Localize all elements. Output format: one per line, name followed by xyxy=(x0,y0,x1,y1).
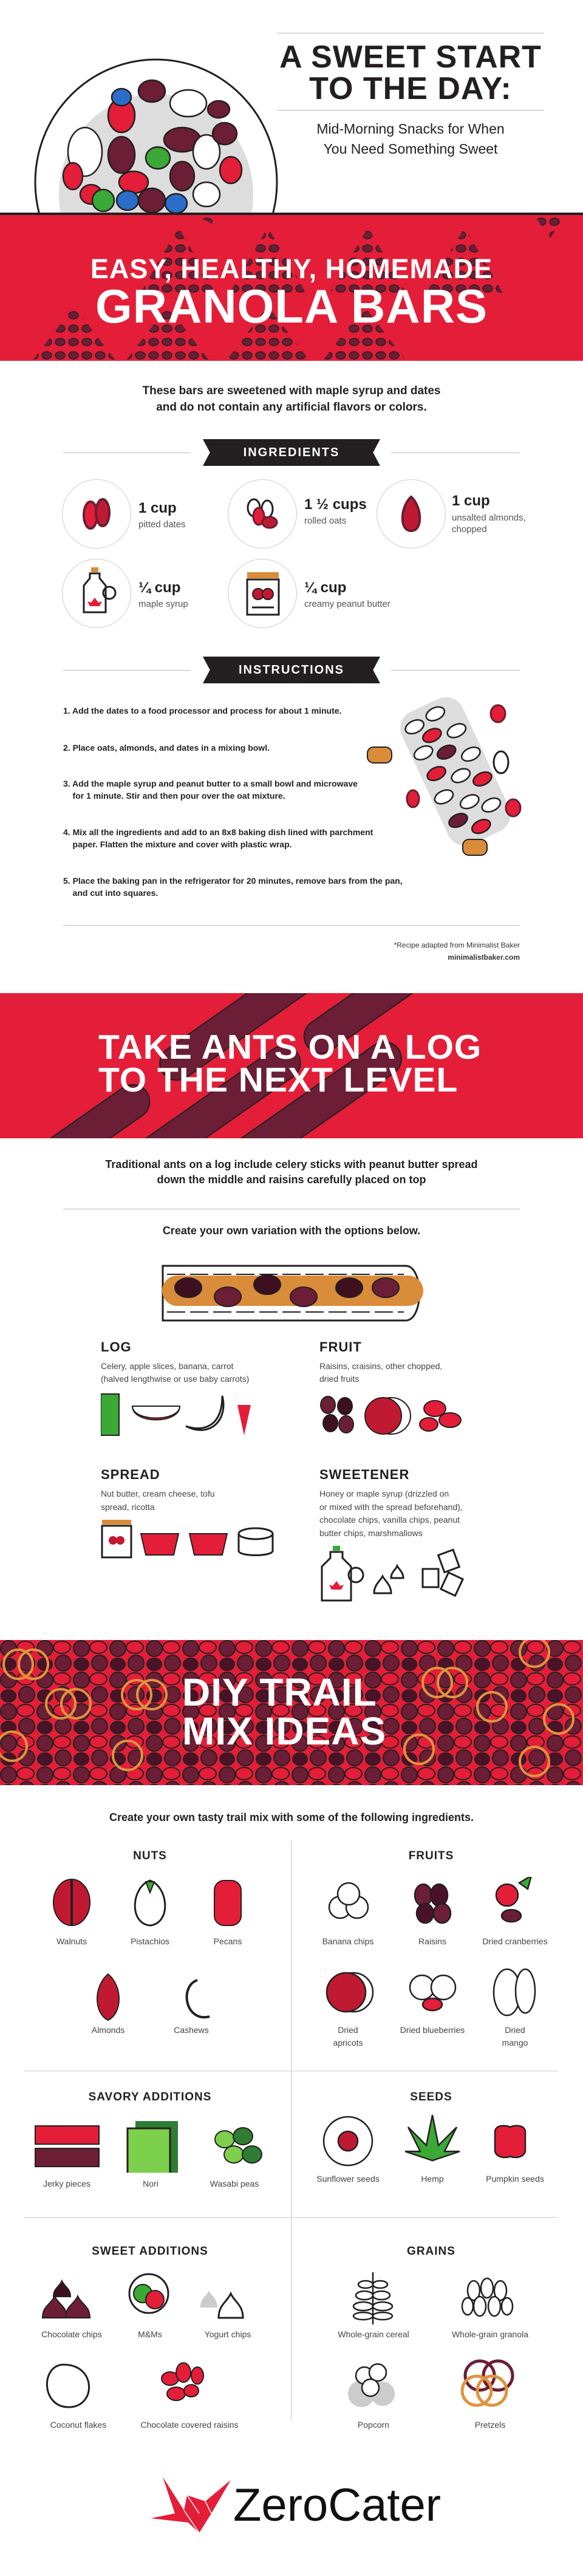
intro text granola: and do not contain any artificial flavors or colors. xyxy=(156,401,427,414)
text: 5. Place the baking pan in the refrigerator for 20 minutes, remove bars from the pan, xyxy=(63,876,403,886)
text: 2. Place oats, almonds, and dates in a mixing bowl. xyxy=(63,743,270,753)
option: log: (halved lengthwise or use baby carrots) xyxy=(101,1374,249,1384)
heading: ingredients: INGREDIENTS xyxy=(244,446,339,459)
panel: nuts: Cashews xyxy=(174,2025,209,2035)
recipe credit xyxy=(394,941,520,962)
panel: fruits: Dried xyxy=(505,2025,525,2035)
panel: sweet additions xyxy=(41,2245,251,2430)
ingredient: dates xyxy=(62,479,186,548)
option: log: LOG xyxy=(101,1339,132,1355)
panel: fruits: FRUITS xyxy=(409,1850,454,1862)
ingredient: dates: pitted dates xyxy=(138,519,186,530)
ingredient: peanut butter: ¼ cup xyxy=(304,579,346,596)
banner: granola bars: GRANOLA BARS xyxy=(95,279,488,333)
panel: fruits: Dried blueberries xyxy=(400,2025,465,2035)
option: log: Celery, apple slices, banana, carrot xyxy=(101,1361,233,1371)
recipe credit: *Recipe adapted from Minimalist Baker xyxy=(394,941,520,949)
instruction steps xyxy=(63,706,403,898)
panel: nuts: Pistachios xyxy=(131,1936,169,1946)
subtitle: You Need Something Sweet xyxy=(324,141,497,157)
option: sweetener xyxy=(319,1467,464,1601)
intro text ants xyxy=(105,1158,478,1186)
ingredient: almonds: unsalted almonds, xyxy=(452,513,526,523)
panel: nuts: NUTS xyxy=(133,1850,167,1862)
panel: seeds: Sunflower seeds xyxy=(316,2174,380,2184)
panel: sweet additions: Chocolate covered raisins xyxy=(140,2420,239,2430)
panel: savory additions: Nori xyxy=(143,2179,159,2188)
panel: grains: Whole-grain cereal xyxy=(338,2329,409,2339)
panel: sweet additions: Coconut flakes xyxy=(50,2420,106,2430)
panel: savory additions: SAVORY ADDITIONS xyxy=(89,2091,211,2103)
ingredient: maple syrup xyxy=(62,559,188,628)
banner title xyxy=(98,1028,482,1099)
panel: savory additions: Wasabi peas xyxy=(210,2179,259,2188)
panel: grains: Pretzels xyxy=(475,2420,505,2430)
panel: grains xyxy=(338,2245,528,2430)
grid dividers xyxy=(291,1840,292,2421)
banner title: EASY, HEALTHY, HOMEMADE xyxy=(90,253,493,284)
banner title: DIY TRAIL xyxy=(182,1670,377,1714)
ingredient: dates: 1 cup xyxy=(138,500,177,516)
panel: sweet additions: Yogurt chips xyxy=(205,2329,251,2339)
intro text trail mix: Create your own tasty trail mix with some of the following ingredients. xyxy=(109,1811,474,1823)
panel: fruits: Banana chips xyxy=(322,1936,373,1946)
ingredient: oats: 1 ½ cups xyxy=(304,496,367,513)
text: and cut into squares. xyxy=(73,888,158,898)
panel: sweet additions: SWEET ADDITIONS xyxy=(92,2245,208,2258)
subtitle: Mid-Morning Snacks for When xyxy=(316,121,505,137)
intro text granola xyxy=(142,384,441,414)
logo: ZeroCater xyxy=(151,2477,441,2533)
panel: grains: Whole-grain granola xyxy=(452,2329,528,2339)
banner title xyxy=(182,1670,386,1753)
banner title: MIX IDEAS xyxy=(182,1709,386,1753)
option: sweetener: Honey or maple syrup (drizzled on xyxy=(319,1489,449,1498)
intro text ants: down the middle and raisins carefully placed on top xyxy=(157,1174,426,1186)
option: sweetener: butter chips, marshmallows xyxy=(319,1528,423,1538)
panel: sweet additions: M&Ms xyxy=(138,2329,162,2339)
panel: nuts: Almonds xyxy=(92,2025,124,2035)
intro text granola: These bars are sweetened with maple syrup and dates xyxy=(142,384,441,397)
ingredient: oats xyxy=(228,479,367,548)
option: fruit: Raisins, craisins, other chopped, xyxy=(319,1361,442,1371)
banner: DIY trail mix xyxy=(0,1640,583,1785)
illustration: granola bar xyxy=(367,697,521,856)
panel: savory additions xyxy=(35,2091,262,2188)
panel: nuts: Pecans xyxy=(214,1936,242,1946)
logo: ZeroCater: ZeroCater xyxy=(233,2479,441,2531)
panel: seeds: SEEDS xyxy=(410,2091,452,2103)
panel: fruits: Dried cranberries xyxy=(482,1936,548,1946)
text: 3. Add the maple syrup and peanut butter to a small bowl and microwave xyxy=(63,779,358,788)
option: sweetener: SWEETENER xyxy=(319,1467,409,1482)
option: spread xyxy=(101,1467,273,1559)
text: 4. Mix all the ingredients and add to an 8x8 baking dish lined with parchment xyxy=(63,827,373,837)
banner title: TAKE ANTS ON A LOG xyxy=(98,1028,482,1067)
subtitle xyxy=(316,121,505,157)
option: sweetener: chocolate chips, vanilla chips, peanut xyxy=(319,1515,460,1525)
option: fruit xyxy=(319,1339,462,1435)
banner title: TO THE NEXT LEVEL xyxy=(98,1061,458,1099)
header: bowl illustration xyxy=(34,58,278,213)
banner: ants on a log xyxy=(0,993,583,1138)
option: spread: Nut butter, cream cheese, tofu xyxy=(101,1489,215,1498)
panel: nuts: Walnuts xyxy=(56,1936,87,1946)
ingredient: almonds: chopped xyxy=(452,524,487,535)
option: spread: SPREAD xyxy=(101,1467,160,1482)
ingredient: peanut butter xyxy=(228,559,390,628)
text: 1. Add the dates to a food processor and process for about 1 minute. xyxy=(63,706,341,716)
heading: instructions: INSTRUCTIONS xyxy=(239,663,344,677)
ingredient: almonds: 1 cup xyxy=(452,493,490,509)
option: fruit: dried fruits xyxy=(319,1374,359,1384)
panel: fruits: Dried xyxy=(338,2025,358,2035)
ingredient: oats: rolled oats xyxy=(304,516,346,526)
title: A sweet start to the day: TO THE DAY: xyxy=(309,71,512,106)
option: spread: spread, ricotta xyxy=(101,1502,155,1512)
panel: grains: GRAINS xyxy=(407,2245,455,2258)
panel: sweet additions: Chocolate chips xyxy=(41,2329,102,2339)
panel: fruits xyxy=(322,1850,548,2048)
ingredient: almonds xyxy=(377,479,526,548)
option: sweetener: or mixed with the spread beforehand), xyxy=(319,1502,463,1511)
panel: fruits: apricots xyxy=(333,2038,363,2048)
title: A sweet start to the day: A SWEET START xyxy=(279,39,542,75)
intro text ants: Traditional ants on a log include celery sticks with peanut butter spread xyxy=(105,1158,478,1170)
panel: nuts xyxy=(53,1850,242,2035)
text: for 1 minute. Stir and then pour over the oat mixture. xyxy=(73,791,285,801)
ingredient: maple syrup: ¼ cup xyxy=(138,579,180,596)
banner: granola bars xyxy=(0,213,583,361)
option: log xyxy=(101,1339,251,1436)
prompt text: Create your own variation with the options below. xyxy=(163,1225,420,1237)
panel: fruits: Raisins xyxy=(418,1936,446,1946)
ingredient: peanut butter: creamy peanut butter xyxy=(304,599,390,609)
title: A sweet start to the day xyxy=(279,39,542,106)
panel: seeds: Hemp xyxy=(421,2174,444,2184)
panel: fruits: mango xyxy=(502,2038,528,2048)
panel: seeds: Pumpkin seeds xyxy=(486,2174,544,2184)
panel: seeds xyxy=(316,2091,544,2184)
panel: grains: Popcorn xyxy=(358,2420,389,2430)
ingredient: maple syrup: maple syrup xyxy=(138,599,188,609)
text: paper. Flatten the mixture and cover with plastic wrap. xyxy=(73,839,292,849)
illustration: ants on a log xyxy=(162,1265,423,1322)
recipe credit: minimalistbaker.com xyxy=(448,953,520,962)
option: fruit: FRUIT xyxy=(319,1339,362,1355)
panel: savory additions: Jerky pieces xyxy=(43,2179,90,2188)
